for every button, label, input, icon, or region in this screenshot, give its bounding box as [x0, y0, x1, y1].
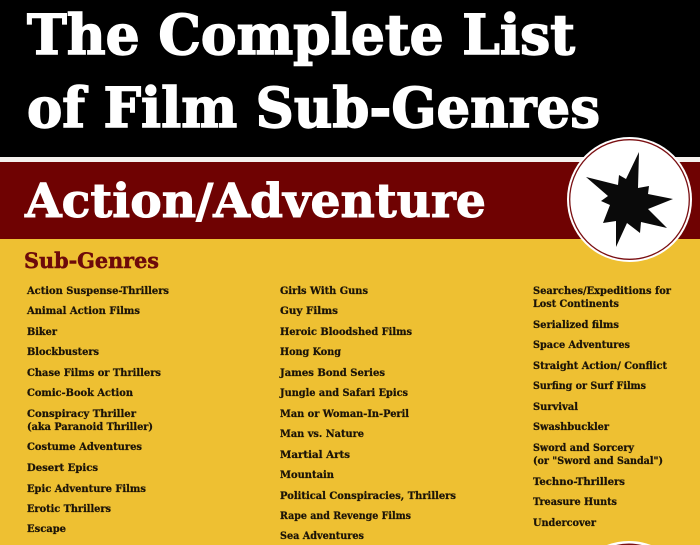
column 2 list: James Bond Series	[279, 367, 385, 379]
header: black title panel	[0, 0, 700, 157]
column 2 list: Man or Woman-In-Peril	[280, 408, 409, 420]
column 1 list: Escape	[27, 523, 66, 535]
column 3 list: Space Adventures	[533, 339, 630, 351]
column 1 list: Chase Films or Thrillers	[27, 367, 161, 379]
column 2 list: Rape and Revenge Films	[280, 510, 411, 522]
column 1 list: Comic-Book Action	[27, 387, 133, 399]
column 1 list: Erotic Thrillers	[27, 503, 111, 515]
column 2 list: Hong Kong	[280, 346, 341, 358]
heading: Sub-Genres: Sub-Genres	[24, 248, 159, 273]
column 3 list: Surfing or Surf Films	[533, 380, 646, 392]
column 2 list: Heroic Bloodshed Films	[280, 326, 412, 338]
column 3 list: Swashbuckler	[533, 421, 610, 433]
column 3 list: Undercover	[533, 517, 597, 529]
panel: category band	[0, 157, 700, 239]
column 1 list: Conspiracy Thriller	[27, 408, 137, 420]
column 3 list: Treasure Hunts	[533, 496, 617, 508]
icon: next badge cropped at bottom edge	[607, 541, 651, 545]
column 2 list: Political Conspiracies, Thrillers	[280, 490, 456, 502]
column 3 list: (or "Sword and Sandal")	[533, 455, 663, 467]
column 3 list: Serialized films	[533, 319, 619, 331]
icon: explosion badge	[567, 137, 692, 262]
column 3 list: Survival	[533, 401, 578, 413]
title	[27, 2, 600, 140]
band heading: Action/Adventure	[24, 174, 486, 229]
column 2 list: Martial Arts	[280, 449, 350, 461]
panel: yellow list background	[0, 239, 700, 545]
column 1 list: Biker	[27, 326, 58, 338]
column 3 list: Straight Action/ Conflict	[533, 360, 667, 372]
column 1 list: Animal Action Films	[26, 305, 140, 317]
title: The Complete List	[27, 2, 576, 67]
column 1 list: Desert Epics	[27, 462, 98, 474]
column 1 list: Action Suspense-Thrillers	[26, 285, 169, 297]
column 3 list: Sword and Sorcery	[533, 442, 635, 454]
column 1 list: Epic Adventure Films	[27, 483, 146, 495]
column 2 list: Girls With Guns	[280, 285, 368, 297]
column 1 list: Blockbusters	[27, 346, 99, 358]
column 3 list: Lost Continents	[533, 298, 619, 310]
column 1 list: (aka Paranoid Thriller)	[27, 421, 153, 433]
column 1 list: Costume Adventures	[27, 441, 142, 453]
column 2 list: Man vs. Nature	[280, 428, 364, 440]
column 2 list: Jungle and Safari Epics	[279, 387, 408, 399]
column 3 list: Searches/Expeditions for	[533, 285, 672, 297]
column 3 list	[533, 285, 672, 529]
column 2 list: Guy Films	[280, 305, 338, 317]
column 2 list	[279, 285, 456, 542]
column 1 list	[26, 285, 169, 535]
column 3 list: Techno-Thrillers	[533, 476, 625, 488]
title: of Film Sub-Genres	[27, 75, 600, 140]
column 2 list: Sea Adventures	[280, 530, 364, 542]
column 2 list: Mountain	[280, 469, 334, 481]
